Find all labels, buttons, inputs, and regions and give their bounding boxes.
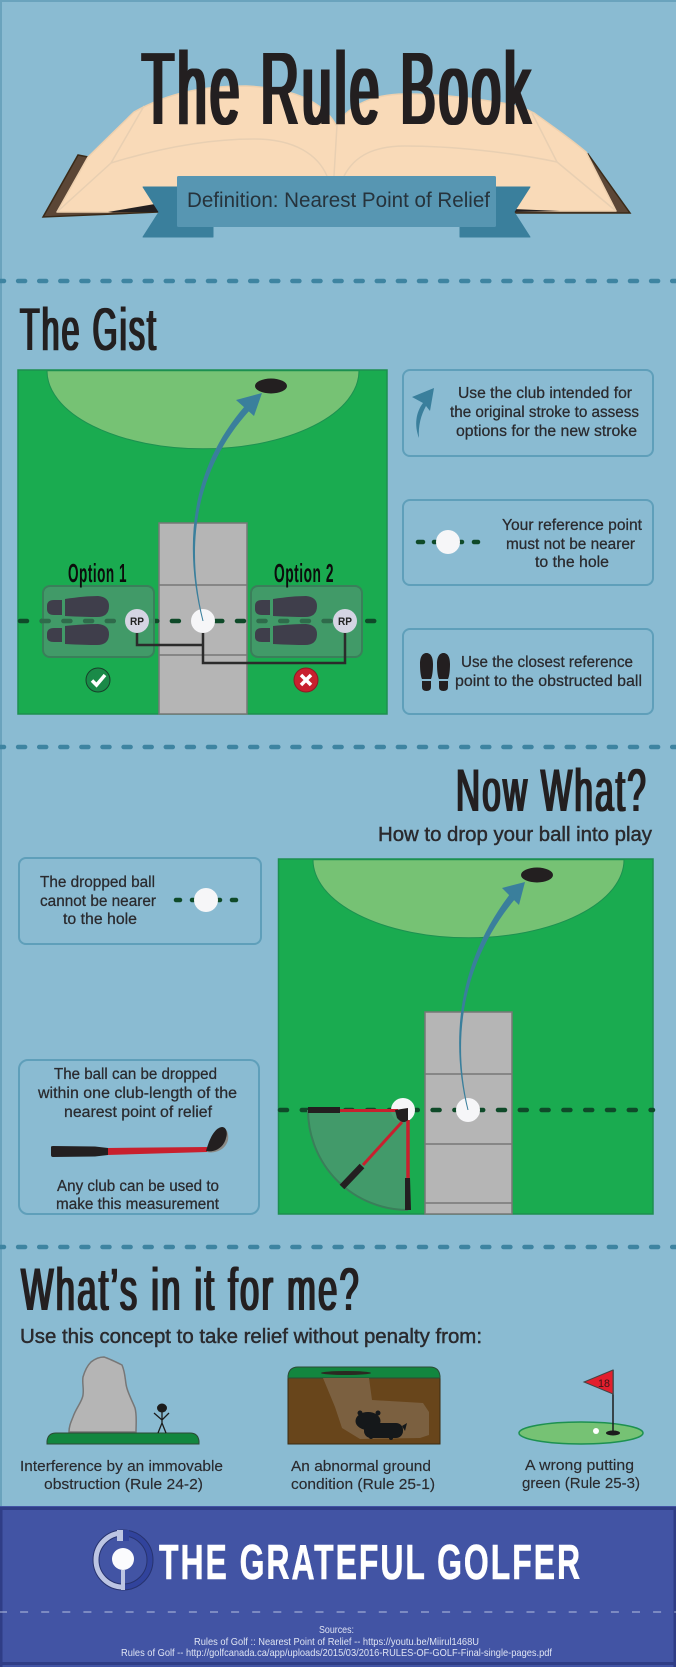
- subheading: How to drop your ball into play: [378, 824, 652, 846]
- caption: obstruction: Interference by an immovable: [20, 1458, 223, 1475]
- icon: cross: [294, 668, 318, 692]
- reference point right: RP: [338, 616, 352, 628]
- text: Your reference point: [502, 517, 643, 534]
- caption: ground condition: condition (Rule 25-1): [291, 1476, 435, 1493]
- icon: wrong putting green: 18: [598, 1378, 610, 1390]
- icon: abnormal ground condition: [288, 1367, 440, 1444]
- callout: dropped ball: [19, 858, 261, 944]
- icon: wrong putting green: [519, 1370, 643, 1444]
- heading: The Gist: The Gist: [20, 296, 158, 363]
- subtitle: Definition: Nearest Point of Relief: [187, 189, 490, 212]
- panel: gist course diagram: [18, 370, 387, 714]
- subheading: Use this concept to take relief without penalty from:: [20, 1326, 482, 1348]
- label: option 1: Option 1: [68, 558, 127, 588]
- reference point left: [125, 609, 149, 633]
- option 1 box: [42, 586, 154, 657]
- text: [502, 517, 643, 571]
- logo: [93, 1530, 153, 1590]
- footer: [0, 1506, 676, 1667]
- reference point right: [333, 609, 357, 633]
- cart path: [159, 523, 247, 714]
- reference point left: RP: [130, 616, 144, 628]
- callout: reference point: [403, 500, 653, 585]
- line of equal distance: [280, 1108, 653, 1112]
- caption: ground condition: An abnormal ground: [291, 1458, 431, 1475]
- caption: putting green: [522, 1457, 640, 1492]
- text: [455, 654, 642, 690]
- text: options for the new stroke: [456, 423, 637, 440]
- text: point to the obstructed ball: [455, 673, 642, 690]
- caption: putting green: A wrong putting: [525, 1457, 634, 1474]
- text: [450, 385, 639, 440]
- text: [40, 874, 156, 928]
- putting green: [313, 860, 624, 938]
- label: option 2: Option 2: [274, 558, 334, 588]
- ball: [191, 609, 215, 633]
- callout: club intended: [403, 370, 653, 456]
- callout: club length: [19, 1060, 259, 1214]
- icon: immovable obstruction: [47, 1357, 199, 1444]
- caption: putting green: green (Rule 25-3): [522, 1475, 640, 1492]
- text: within one club-length of the: [37, 1085, 237, 1102]
- text: nearest point of relief: [64, 1104, 213, 1121]
- caption: ground condition: [291, 1458, 435, 1493]
- text: [56, 1178, 220, 1213]
- ball at reference point: [391, 1098, 415, 1122]
- option 2 box: [251, 586, 362, 657]
- text: [37, 1066, 237, 1121]
- icon: dashed line with ball: [418, 530, 478, 554]
- panel: drop diagram: [278, 859, 653, 1214]
- icon: golf club: [51, 1127, 228, 1157]
- arrow to hole: [193, 393, 262, 621]
- text: cannot be nearer: [40, 893, 156, 910]
- hole: [521, 868, 553, 882]
- heading: What's in it for me?: What’s in it for me?: [21, 1256, 361, 1323]
- text: the original stroke to assess: [450, 404, 639, 421]
- connectors: [137, 630, 345, 663]
- caption: obstruction: obstruction (Rule 24-2): [44, 1476, 203, 1493]
- arrow to hole: [459, 882, 525, 1110]
- sources: Rules of Golf -- http://golfcanada.ca/app/uploads/2015/03/2016-RULES-OF-GOLF-Final-single-pages.pdf: [121, 1647, 552, 1659]
- text: Use the club intended for: [458, 385, 632, 402]
- text: The ball can be dropped: [54, 1066, 217, 1083]
- text: Use the closest reference: [461, 654, 633, 671]
- line of equal distance: [20, 619, 387, 623]
- sources: [121, 1624, 552, 1659]
- caption: obstruction: [20, 1458, 223, 1493]
- icon: footprints: [420, 653, 450, 691]
- text: Any club can be used to: [57, 1178, 219, 1195]
- clubs: [308, 1108, 411, 1210]
- text: make this measurement: [56, 1196, 220, 1213]
- icon: dashed line with ball: [176, 888, 236, 912]
- icon: open book: [43, 86, 630, 217]
- ball: [456, 1098, 480, 1122]
- sources: Rules of Golf :: Nearest Point of Relief -- https://youtu.be/Miirul1468U: [194, 1636, 479, 1648]
- text: The dropped ball: [40, 874, 155, 891]
- icon: check: [86, 668, 110, 692]
- drop area: [308, 1110, 408, 1210]
- text: must not be nearer: [506, 536, 635, 553]
- callout: closest reference: [403, 629, 653, 714]
- icon: arrow: [412, 388, 434, 438]
- putting green: [47, 371, 359, 449]
- sources: Sources:: [319, 1624, 354, 1636]
- text: to the hole: [63, 911, 137, 928]
- cart path: [425, 1012, 512, 1214]
- banner ribbon: [143, 176, 530, 237]
- hole: [255, 378, 287, 394]
- text: to the hole: [535, 554, 609, 571]
